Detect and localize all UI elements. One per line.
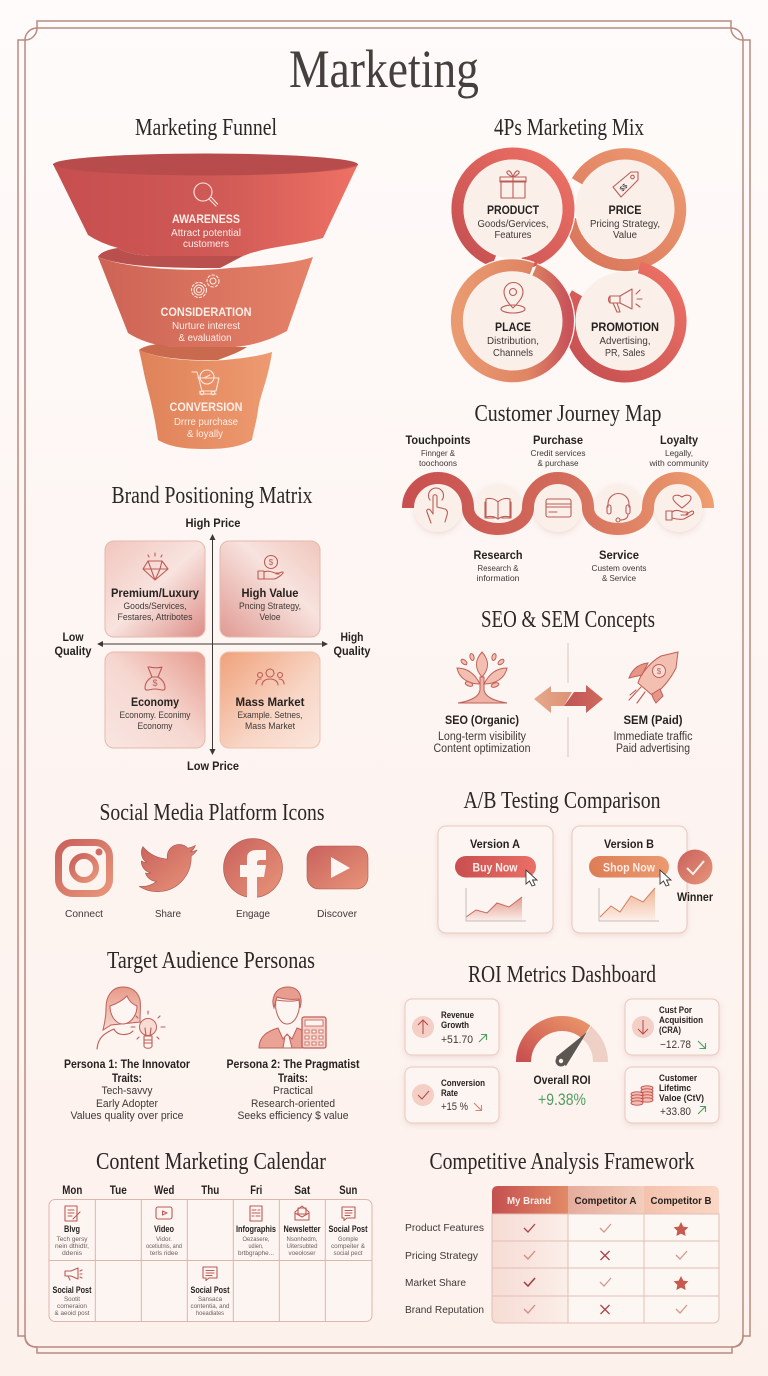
quadrant: high value: Veloe <box>260 612 280 623</box>
gauge: overall ROI: +9.38% <box>538 1090 586 1109</box>
4P: promotion: PROMOTION <box>591 320 659 334</box>
quadrant: premium luxury: Premium/Luxury <box>111 586 199 600</box>
quadrant: economy: Economy <box>131 695 179 709</box>
metric card: cost per acquisition: −12.78 <box>660 1039 691 1051</box>
journey step: research: Research & <box>478 563 519 573</box>
text: persona 2: Traits: <box>278 1071 308 1085</box>
metric card: customer lifetime value: Valoe (CtV) <box>659 1093 704 1103</box>
row labels: Pricing Strategy <box>405 1250 479 1262</box>
heading: calendar: Content Marketing Calendar <box>96 1149 326 1175</box>
table header row: Competitor B <box>650 1195 712 1207</box>
gauge: overall ROI <box>524 1023 600 1109</box>
quadrant: economy <box>105 652 205 748</box>
funnel tier: conversion: Drrre purchase <box>174 417 238 428</box>
funnel tier: consideration: Nurture interest <box>172 321 240 332</box>
journey step: service <box>592 484 646 583</box>
metric card: conversion rate: Conversion <box>441 1078 485 1088</box>
metric card: customer lifetime value: +33.80 <box>660 1106 691 1118</box>
4P: place: Channels <box>493 348 533 359</box>
axis labels: High <box>340 630 364 644</box>
quadrant: high value <box>220 541 320 637</box>
funnel tier: awareness: Attract potential <box>171 228 241 239</box>
4P: place: Distribution, <box>487 336 539 347</box>
panel: A/B testing comparison <box>438 788 713 933</box>
calendar entry: newsletter: voeoloser <box>288 1250 316 1257</box>
heading: social media: Social Media Platform Icons <box>100 800 324 826</box>
text: persona 1: Persona 1: The Innovator <box>64 1057 190 1071</box>
weekday header: Thu <box>201 1183 219 1197</box>
journey step: touchpoints: Finnger & <box>421 448 455 458</box>
metric card: customer lifetime value <box>625 1067 719 1123</box>
journey step: purchase <box>530 433 586 532</box>
row labels <box>405 1222 484 1316</box>
icon: facebook <box>224 838 282 920</box>
panel: target audience personas <box>64 948 360 1122</box>
calendar entry: video: terls ridee <box>150 1250 178 1257</box>
heading: 4Ps: 4Ps Marketing Mix <box>494 115 644 141</box>
calendar entry: infographic: Infographis <box>236 1224 276 1235</box>
text: persona 2: Persona 2: The Pragmatist <box>226 1057 360 1071</box>
4P: place: PLACE <box>495 320 531 334</box>
icon: instagram: Connect <box>65 908 103 920</box>
text: persona 1: Traits: <box>112 1071 142 1085</box>
calendar entry: video: ocetiutnis, and <box>146 1243 182 1250</box>
arrow: left pointing SEO <box>534 686 572 713</box>
text: persona 2: Research-oriented <box>251 1098 335 1110</box>
text: SEM paid: Paid advertising <box>616 743 690 755</box>
version A card: Version A <box>470 837 520 851</box>
text: SEM paid: SEM (Paid) <box>624 713 683 727</box>
icon: facebook: Engage <box>236 908 270 920</box>
gauge: overall ROI: Overall ROI <box>534 1073 590 1087</box>
4P: product: Features <box>494 230 532 241</box>
calendar grid <box>49 1200 372 1322</box>
calendar entry: social post thursday: Social Post <box>190 1285 230 1296</box>
metric card: conversion rate: Rate <box>441 1088 458 1098</box>
axis labels: Quality <box>334 644 371 658</box>
funnel tier: awareness: customers <box>183 239 229 250</box>
weekday header: Tue <box>110 1183 127 1197</box>
row labels: Brand Reputation <box>405 1304 484 1316</box>
weekday header: Sun <box>339 1183 357 1197</box>
calendar entry: blog: Blvg <box>64 1224 80 1235</box>
calendar entry: social post thursday: hoeadiates <box>196 1310 225 1317</box>
journey step: purchase: & purchase <box>538 458 579 468</box>
calendar entry: blog: nein dthidtr, <box>55 1243 89 1250</box>
quadrant: premium luxury <box>105 541 205 637</box>
icon: growing plant <box>457 652 507 703</box>
icon: rocket <box>629 652 678 703</box>
calendar entry: social post monday: Sootit <box>64 1296 80 1303</box>
journey step: loyalty: Legally, <box>665 448 693 458</box>
calendar entry: blog: ddenis <box>62 1250 83 1257</box>
text: persona 1: Tech-savvy <box>102 1085 153 1097</box>
metric card: conversion rate: +15 % <box>441 1101 468 1113</box>
quadrant: mass market: Mass Market <box>245 721 295 732</box>
quadrant: high value: Pncing Strategy, <box>239 601 301 612</box>
winner badge: Winner <box>677 890 713 904</box>
text: persona 2: Seeks efficiency $ value <box>238 1110 348 1122</box>
weekday header: Wed <box>154 1183 174 1197</box>
calendar entry: newsletter: Newsletter <box>284 1224 321 1235</box>
4P: product <box>464 160 562 258</box>
axis labels: Low <box>62 630 84 644</box>
journey step: touchpoints: Touchpoints <box>406 433 471 447</box>
calendar entry: social post thursday <box>190 1267 230 1317</box>
funnel tier: consideration: CONSIDERATION <box>160 305 252 319</box>
calendar entry: social post monday: comeraion <box>57 1303 87 1310</box>
metric card: cost per acquisition: (CRA) <box>659 1025 681 1035</box>
quadrant: high value: $ <box>269 558 274 567</box>
weekday header <box>62 1183 357 1197</box>
metric card: customer lifetime value: Customer <box>659 1073 697 1083</box>
metric card: cost per acquisition <box>625 999 719 1055</box>
journey step: service: Service <box>599 548 639 562</box>
journey wave path <box>408 478 708 529</box>
journey step: research <box>474 484 522 583</box>
journey step: research: information <box>476 573 520 583</box>
calendar entry: infographic: udien, <box>248 1243 264 1250</box>
4Ps interlocking rings <box>457 154 681 377</box>
calendar entry: social post thursday: Sansaca <box>198 1296 222 1303</box>
panel: social media platform icons <box>58 800 368 920</box>
icon: rocket: $ <box>657 667 662 676</box>
weekday header: Mon <box>62 1183 82 1197</box>
calendar entry: newsletter <box>284 1206 321 1257</box>
4P: price: Value <box>613 230 637 241</box>
icon: woman with lightbulb <box>97 987 165 1049</box>
panel: marketing funnel <box>53 115 358 449</box>
version B card: Version B <box>604 837 654 851</box>
quadrant: mass market <box>220 652 320 748</box>
axis labels: Quality <box>54 644 92 658</box>
quadrant: mass market: Example. Setnes, <box>238 710 302 721</box>
calendar entry: newsletter: Nsonhedm, <box>286 1236 318 1243</box>
heading: SEO and SEM: SEO & SEM Concepts <box>481 607 655 633</box>
axis labels: Low Price <box>187 759 239 773</box>
text: persona 2: Practical <box>273 1085 313 1097</box>
row labels: Product Features <box>405 1222 484 1234</box>
panel: ROI metrics dashboard <box>405 962 719 1123</box>
metric card: revenue growth: Revenue <box>441 1010 474 1020</box>
text: SEO organic: SEO (Organic) <box>445 713 519 727</box>
version B card: Shop Now <box>603 860 656 874</box>
funnel tier: awareness: AWARENESS <box>172 212 240 226</box>
calendar entry: newsletter: Uitersubted <box>286 1243 318 1250</box>
calendar entry: social post sunday: Social Post <box>328 1224 368 1235</box>
text: SEO organic: Long-term visibility <box>438 731 526 743</box>
table header row <box>492 1186 719 1214</box>
quadrant: premium luxury: Goods/Services, <box>124 601 186 612</box>
heading: customer journey: Customer Journey Map <box>474 401 662 427</box>
journey step: purchase: Credit services <box>530 448 586 458</box>
icon: instagram <box>58 842 110 920</box>
calendar entry: infographic: Oezasere, <box>242 1236 270 1243</box>
4P: price: $$ <box>619 183 629 193</box>
funnel tier: conversion: CONVERSION <box>170 400 242 414</box>
panel: competitive analysis framework <box>405 1149 719 1323</box>
journey step: touchpoints <box>406 433 471 532</box>
heading: marketing funnel: Marketing Funnel <box>135 115 277 141</box>
metric card: revenue growth <box>405 999 499 1055</box>
funnel tier: consideration: & evaluation <box>178 333 232 344</box>
winner badge <box>677 850 713 904</box>
text: SEM paid: Immediate traffic <box>614 731 693 743</box>
table body grid <box>492 1214 719 1323</box>
comparison table <box>405 1186 719 1323</box>
4P: price <box>576 160 674 258</box>
comparison marks: checks, crosses and stars <box>524 1222 688 1314</box>
metric card: conversion rate <box>405 1067 499 1123</box>
text: SEM paid <box>614 713 693 755</box>
calendar entry: infographic <box>236 1206 276 1257</box>
icon: twitter bird <box>139 844 197 920</box>
4P: promotion: Advertising, <box>600 336 650 347</box>
text: persona 1: Early Adopter <box>96 1098 158 1110</box>
quadrant: premium luxury: Festares, Attribotes <box>118 612 193 623</box>
text: SEO organic <box>434 713 530 755</box>
table header row: Competitor A <box>574 1195 637 1207</box>
metric card: revenue growth: Growth <box>441 1020 469 1030</box>
version B card <box>572 826 687 933</box>
version A card <box>438 826 553 933</box>
4P: place <box>464 272 562 370</box>
calendar entry: social post monday <box>52 1268 92 1317</box>
journey step: loyalty <box>648 433 709 532</box>
calendar entry: social post sunday: social pect <box>334 1250 363 1257</box>
panel: content marketing calendar <box>49 1149 372 1322</box>
calendar entry: video: Video <box>154 1224 174 1235</box>
text: SEO organic: Content optimization <box>434 743 530 755</box>
text: persona 1: Values quality over price <box>70 1110 184 1122</box>
funnel tier: awareness <box>53 154 358 256</box>
arrow: right pointing SEM <box>564 685 603 713</box>
journey step: purchase: Purchase <box>533 433 583 447</box>
4P: promotion <box>576 272 674 370</box>
metric card: revenue growth: +51.70 <box>441 1034 473 1046</box>
calendar entry: social post sunday: Gomple <box>338 1236 358 1243</box>
calendar entry: infographic: brtbgraphe... <box>238 1250 274 1257</box>
quadrant: economy: Economy <box>138 721 173 732</box>
heading: ROI: ROI Metrics Dashboard <box>468 962 656 988</box>
metric card: cost per acquisition: Cust Por <box>659 1005 692 1015</box>
funnel tier: conversion <box>139 344 272 449</box>
weekday header: Fri <box>250 1183 262 1197</box>
title: Marketing <box>289 39 479 99</box>
axis labels: High Price <box>186 516 241 530</box>
journey step: service: Custem ovents <box>592 563 646 573</box>
journey step: research: Research <box>474 548 522 562</box>
metric card: cost per acquisition: Acquisition <box>659 1015 703 1025</box>
funnel chart <box>53 154 358 449</box>
axes with arrows <box>97 534 328 755</box>
calendar entry: blog: Tech gersy <box>56 1236 88 1243</box>
heading: A/B testing: A/B Testing Comparison <box>464 788 660 814</box>
icon: twitter bird: Share <box>155 908 181 920</box>
journey step: touchpoints: toochoons <box>419 458 457 468</box>
quadrant: high value: High Value <box>242 586 299 600</box>
text: persona 2 <box>226 1057 360 1122</box>
4P: price: Pricing Strategy, <box>590 219 660 230</box>
panel: brand positioning matrix <box>54 483 371 773</box>
calendar entry: blog <box>55 1206 89 1257</box>
4P: promotion: PR, Sales <box>605 348 645 359</box>
funnel tier: conversion: & loyally <box>187 429 223 440</box>
4P: product: PRODUCT <box>487 203 540 217</box>
calendar entry: video <box>146 1207 182 1257</box>
heading: personas: Target Audience Personas <box>107 948 315 974</box>
4P: price: PRICE <box>608 203 642 217</box>
calendar entry: social post thursday: contentia, and <box>190 1303 230 1310</box>
heading: brand positioning: Brand Positioning Matrix <box>112 483 312 509</box>
table header row: My Brand <box>507 1195 551 1207</box>
journey step: service: & Service <box>602 573 636 583</box>
calendar entry: social post monday: & aeoid post <box>54 1310 90 1317</box>
heading: competitive analysis: Competitive Analysis Framework <box>430 1149 694 1175</box>
panel: customer journey map <box>406 401 709 583</box>
calendar entry: social post sunday: compeiter & <box>331 1243 366 1250</box>
metric card: customer lifetime value: Lifetimc <box>659 1083 691 1093</box>
journey step: loyalty: with community <box>648 458 709 468</box>
quadrant: mass market: Mass Market <box>236 695 304 709</box>
4P: product: Goods/Gervices, <box>478 219 548 230</box>
version A card: Buy Now <box>472 860 518 874</box>
weekday header: Sat <box>294 1183 310 1197</box>
panel: 4Ps marketing mix <box>457 115 681 377</box>
panel: SEO and SEM concepts <box>434 607 693 757</box>
funnel tier: consideration <box>98 248 313 347</box>
quadrant: economy: $ <box>152 678 158 688</box>
calendar entry: social post sunday <box>328 1207 368 1257</box>
calendar entry: social post monday: Social Post <box>52 1285 92 1296</box>
text: persona 1 <box>64 1057 190 1122</box>
row labels: Market Share <box>405 1277 466 1289</box>
icon: youtube <box>307 846 368 920</box>
calendar entry: video: Vidor. <box>156 1236 172 1243</box>
icon: youtube: Discover <box>317 908 357 920</box>
axis labels <box>54 516 371 773</box>
icon: man with calculator <box>259 987 326 1048</box>
journey step: loyalty: Loyalty <box>660 433 698 447</box>
quadrant: economy: Economy. Econimy <box>120 710 191 721</box>
